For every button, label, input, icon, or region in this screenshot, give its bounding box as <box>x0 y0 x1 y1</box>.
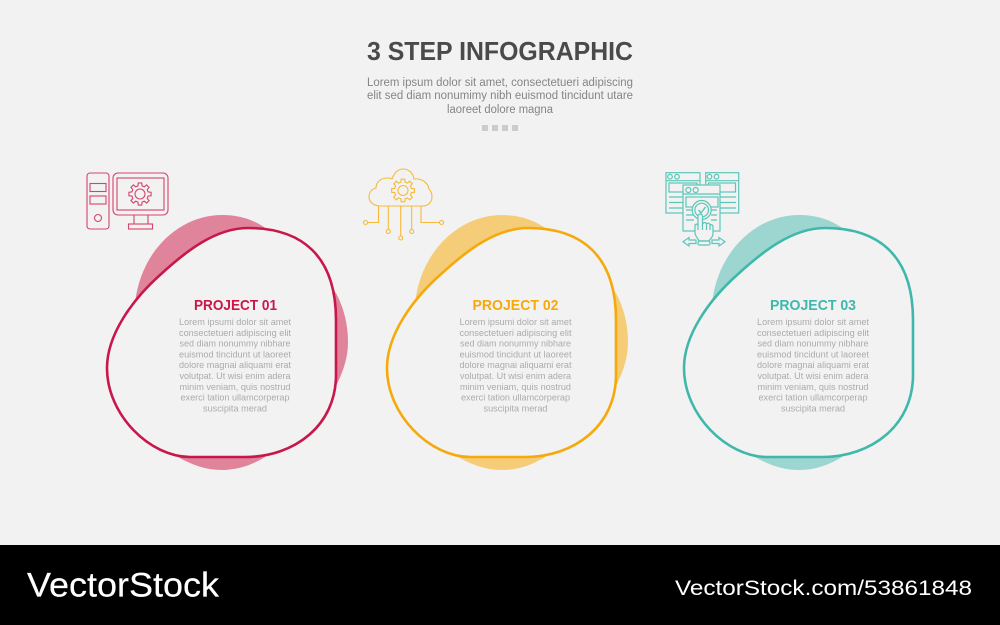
body text: project 02: exerci tation ullamcorperap <box>461 392 570 402</box>
body text: project 02 <box>460 317 572 414</box>
body text: project 01: minim veniam, quis nostrud <box>180 382 290 392</box>
panel: project 03 <box>684 215 913 470</box>
title: 3 STEP INFOGRAPHIC <box>367 38 633 66</box>
body text: project 03: consectetueri adipiscing elit <box>757 328 869 338</box>
body text: project 03: suscipita merad <box>781 404 845 414</box>
body text: project 02: euismod tincidunt ut laoreet <box>460 350 572 360</box>
body text: project 03 <box>757 317 869 414</box>
image id: VectorStock.com/53861848 <box>675 577 972 600</box>
brand wordmark: VectorStock <box>27 566 220 604</box>
body text: project 01: suscipita merad <box>203 404 267 414</box>
body text: project 03: volutpat. Ut wisi enim adera <box>758 371 869 381</box>
outline: project 01 <box>107 228 336 457</box>
pagination dots <box>482 125 518 131</box>
intro text: Lorem ipsum dolor sit amet, consectetueri adipiscing <box>367 77 633 89</box>
blob: project 01 backdrop <box>135 215 348 470</box>
body text: project 01 <box>179 317 291 414</box>
body text: project 03: Lorem ipsumi dolor sit amet <box>757 317 869 327</box>
icon: cloud with gear and circuit nodes <box>364 169 444 240</box>
blob: project 02 backdrop <box>415 215 628 470</box>
heading: project 02: PROJECT 02 <box>472 297 558 314</box>
body text: project 01: dolore magnai aliquami erat <box>179 360 291 370</box>
body text: project 01: euismod tincidunt ut laoreet <box>179 350 291 360</box>
body text: project 03: euismod tincidunt ut laoreet <box>757 350 869 360</box>
intro text: laoreet dolore magna <box>447 104 554 116</box>
outline: project 03 <box>684 228 913 457</box>
footer bar <box>0 545 1000 625</box>
icon: computer tower and monitor with gear <box>87 173 168 229</box>
body text: project 02: dolore magnai aliquami erat <box>460 360 572 370</box>
blob: project 03 backdrop <box>712 215 902 470</box>
icon: web pages with tapping hand <box>666 173 739 246</box>
heading: project 03: PROJECT 03 <box>770 297 856 314</box>
panel: project 01 <box>107 215 348 470</box>
intro text <box>367 77 633 116</box>
body text: project 02: suscipita merad <box>484 404 548 414</box>
body text: project 03: sed diam nonummy nibhare <box>758 338 868 348</box>
body text: project 02: minim veniam, quis nostrud <box>460 382 571 392</box>
body text: project 01: volutpat. Ut wisi enim adera <box>180 371 291 381</box>
outline: project 02 <box>387 228 616 457</box>
panel: project 02 <box>387 215 628 470</box>
body text: project 03: exerci tation ullamcorperap <box>758 392 868 402</box>
intro text: elit sed diam nonumimy nibh euismod tincidunt utare <box>367 90 633 102</box>
body text: project 01: sed diam nonummy nibhare <box>180 338 290 348</box>
body text: project 02: sed diam nonummy nibhare <box>460 338 571 348</box>
body text: project 02: volutpat. Ut wisi enim adera <box>460 371 572 381</box>
body text: project 02: Lorem ipsumi dolor sit amet <box>460 317 572 327</box>
body text: project 01: exerci tation ullamcorperap <box>180 392 290 402</box>
body text: project 03: minim veniam, quis nostrud <box>758 382 868 392</box>
body text: project 02: consectetueri adipiscing elit <box>460 328 572 338</box>
body text: project 01: consectetueri adipiscing elit <box>179 328 291 338</box>
heading: project 01: PROJECT 01 <box>194 297 277 314</box>
body text: project 01: Lorem ipsumi dolor sit amet <box>179 317 291 327</box>
body text: project 03: dolore magnai aliquami erat <box>757 360 869 370</box>
